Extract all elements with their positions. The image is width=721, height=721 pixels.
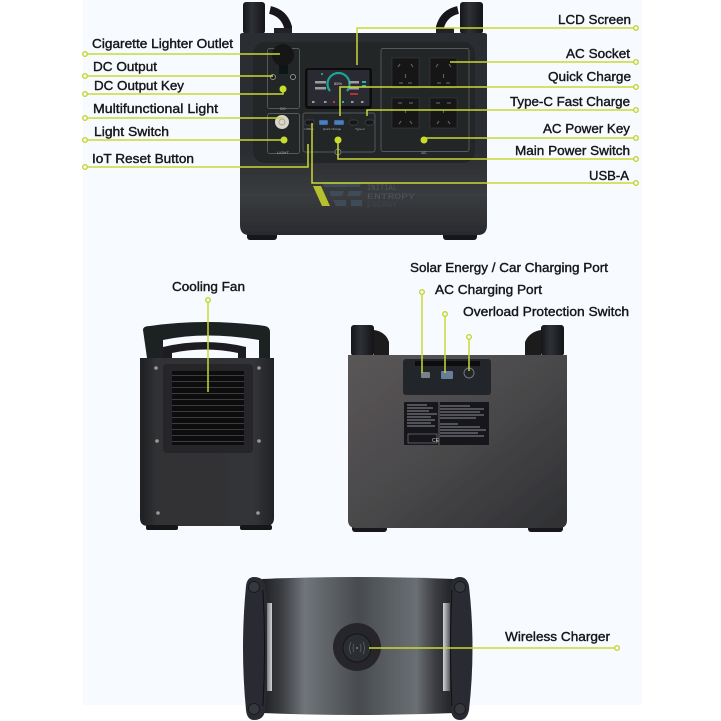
labels: left column: Cigarette Lighter Outlet: [92, 36, 233, 51]
DC output ports: [270, 74, 296, 80]
screws: [154, 366, 261, 515]
label: AC charging port: AC Charging Port: [435, 282, 542, 297]
multifunctional light: [275, 115, 289, 129]
brand logo: ENERGY: [367, 201, 397, 210]
brand logo: [313, 183, 415, 210]
specification label: [404, 402, 489, 445]
top view of power station: [243, 577, 472, 720]
side feet: [146, 525, 272, 530]
port captions: USB-A: [304, 127, 314, 131]
brand logo: ENTROPY: [367, 192, 415, 202]
wireless charging pad: [333, 623, 381, 671]
labels: left column: Multifunctional Light: [93, 101, 218, 116]
AC sockets: [392, 58, 457, 128]
cigarette lighter socket: [272, 44, 294, 74]
labels: right column: LCD Screen: [558, 12, 631, 27]
AC section: [381, 48, 469, 155]
right carry handle: [436, 2, 483, 34]
labels: right column: USB-A: [589, 168, 629, 183]
rear view of power station: [348, 325, 567, 532]
DC section: [268, 44, 300, 111]
rear body: [348, 355, 567, 528]
LCD screen: [305, 68, 372, 109]
LCD screen: 85%: [334, 81, 342, 86]
feet: [247, 230, 477, 240]
brand logo: INITIAL: [367, 183, 397, 193]
quick charge ports: [319, 120, 344, 125]
cooling vent: [163, 364, 253, 453]
light section: [268, 114, 300, 155]
labels: left column: DC Output: [93, 59, 157, 74]
right top handle: [450, 577, 472, 720]
DC label: DC: [280, 106, 286, 111]
leader line: wireless charger: [369, 647, 617, 649]
leader lines: left labels: [85, 54, 308, 167]
labels: right column: [510, 12, 631, 183]
main power symbol: [335, 149, 341, 155]
button indicator dots on front panel: [280, 86, 428, 144]
labels: left column: DC Output Key: [94, 78, 185, 93]
labels: right column: Quick Charge: [548, 69, 631, 84]
labels: left column: Light Switch: [94, 124, 169, 139]
rear handles: [351, 325, 564, 356]
specification label: CE: [432, 438, 440, 444]
label: solar energy port: Solar Energy / Car Charging Port: [410, 260, 608, 275]
LIGHT label: LIGHT: [277, 150, 289, 155]
port captions: Type-C: [355, 127, 366, 131]
handle gaps: [265, 603, 450, 691]
side handles: [143, 322, 270, 358]
side view of power station: [140, 322, 274, 530]
front view of power station: [240, 2, 487, 240]
rear feet: [352, 522, 563, 532]
labels: right column: Main Power Switch: [515, 143, 630, 158]
labels: right column: Type-C Fast Charge: [510, 94, 630, 109]
labels: left column: [92, 36, 233, 166]
main body: [240, 33, 487, 235]
port captions: [304, 127, 366, 131]
label: wireless charger: Wireless Charger: [505, 629, 611, 644]
input port panel: [403, 359, 491, 395]
background panel: [83, 0, 642, 705]
left top handle: [243, 577, 267, 720]
label: cooling fan: Cooling Fan: [172, 279, 245, 294]
end dots on leader lines: [83, 26, 638, 650]
control panel: [253, 42, 475, 163]
Type-C ports: [349, 120, 374, 125]
left carry handle: [243, 2, 292, 34]
port captions: Quick Charge: [323, 127, 342, 131]
AC label: AC: [421, 150, 427, 155]
USB section: [303, 113, 375, 155]
leader lines: right labels: [312, 28, 636, 183]
labels: left column: IoT Reset Button: [92, 151, 194, 166]
USB-A port: [305, 120, 314, 125]
side body: [140, 358, 274, 526]
labels: right column: AC Power Key: [543, 121, 630, 136]
top surface: [262, 577, 455, 715]
label: overload protection switch: Overload Protection Switch: [463, 304, 629, 319]
labels: right column: AC Socket: [566, 46, 630, 61]
leader lines: rear and side labels: [208, 292, 469, 392]
